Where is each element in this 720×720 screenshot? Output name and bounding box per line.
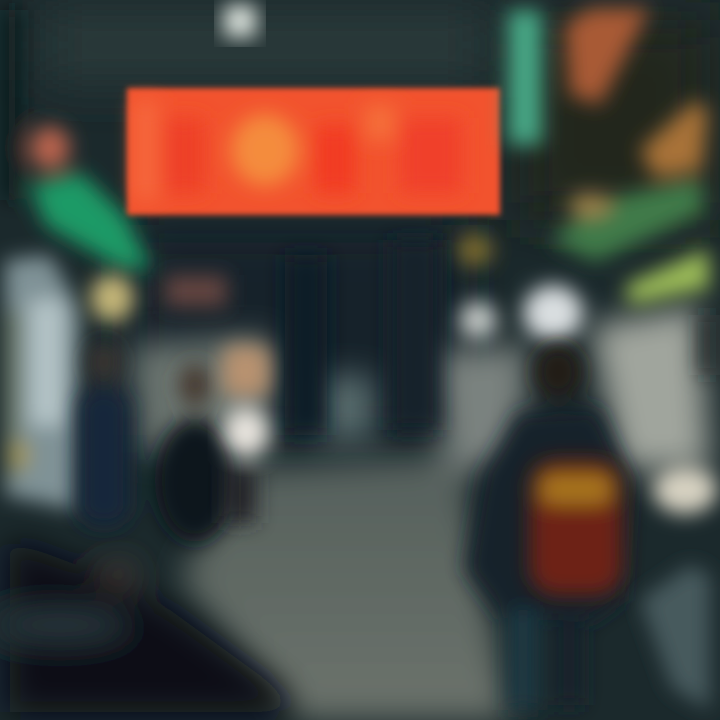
left storefront: pale blue panel	[5, 255, 80, 510]
red banner sign	[127, 88, 500, 215]
background tones	[36, 2, 718, 322]
scooter with white box	[222, 345, 270, 523]
left foreground dark car	[0, 540, 290, 712]
right hanging signs	[457, 8, 710, 305]
central crowd silhouettes	[165, 240, 440, 435]
green hanging sign on left	[5, 10, 152, 270]
backpack	[530, 460, 622, 595]
street ground	[130, 305, 710, 720]
left pedestrians	[78, 342, 235, 542]
foreground person with backpack	[465, 344, 630, 710]
overhead light	[224, 5, 256, 37]
white hats and lights	[90, 274, 583, 341]
banner body	[127, 88, 500, 215]
banner glyph blotches	[135, 100, 462, 200]
right foreground stall	[640, 315, 717, 710]
body	[465, 344, 630, 710]
